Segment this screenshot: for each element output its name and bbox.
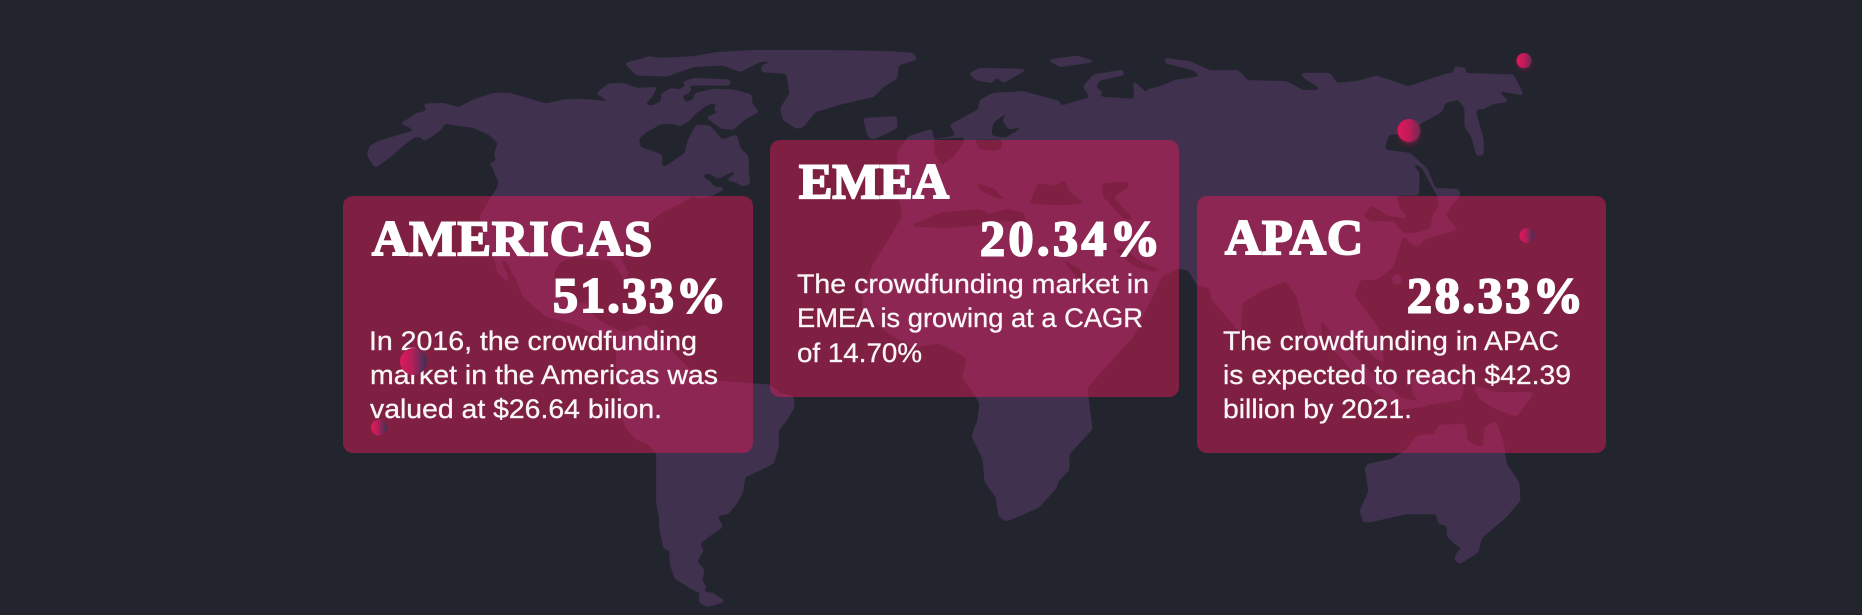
map: Franz Josef Land [1048, 56, 1095, 67]
dot: Americas large [400, 348, 427, 375]
map: Caspian Sea [1102, 182, 1133, 220]
map: inland seas [910, 110, 1439, 297]
APAC panel background [1197, 196, 1606, 453]
map: land masses [367, 50, 1534, 607]
APAC description: billion by 2021. [1223, 394, 1412, 424]
EMEA description: EMEA is growing at a CAGR [797, 303, 1143, 333]
map: Taiwan islet [1392, 275, 1402, 284]
map: Greenland [625, 50, 917, 128]
Americas description: valued at $26.64 bilion. [370, 394, 662, 424]
dot: top right [1516, 53, 1532, 70]
map: Baja California [495, 260, 508, 282]
EMEA description [797, 269, 1149, 368]
APAC description [1223, 326, 1571, 424]
panel: EMEA [770, 140, 1179, 397]
EMEA percentage: 20.34% [980, 210, 1160, 266]
map: North and South America [367, 83, 794, 592]
EMEA description: The crowdfunding market in [797, 269, 1149, 299]
map: Australia [1360, 422, 1520, 564]
Americas panel background [343, 196, 753, 453]
map: Mediterranean [910, 209, 1027, 228]
dot: APAC panel [1520, 228, 1534, 243]
map: New Guinea [1474, 386, 1534, 416]
EMEA panel background [770, 140, 1179, 397]
dot: Americas small [371, 420, 387, 436]
Americas description [369, 326, 718, 424]
APAC description: is expected to reach $42.39 [1223, 360, 1571, 390]
Americas description: market in the Americas was [370, 360, 718, 390]
map: Sea of Japan [1397, 196, 1439, 233]
Americas description: In 2016, the crowdfunding [369, 326, 697, 356]
APAC percentage: 28.33% [1407, 267, 1583, 323]
map: Baltic Sea [975, 140, 1002, 151]
Americas heading: AMERICAS [372, 210, 652, 266]
map: North Sea [933, 138, 964, 165]
EMEA description: of 14.70% [797, 338, 922, 368]
map: Eurasia and Africa [863, 58, 1523, 521]
map: Iceland [863, 117, 897, 139]
map: Arctic island [682, 78, 730, 85]
Americas percentage: 51.33% [553, 267, 726, 323]
EMEA heading: EMEA [799, 153, 949, 209]
map: Adriatic [977, 183, 1005, 200]
map: Sumatra and Java [1330, 343, 1427, 409]
map: Gulf of Bothnia [992, 110, 1023, 137]
dot: northeast Asia [1398, 119, 1420, 145]
map: Borneo [1410, 373, 1464, 404]
panel: APAC [1197, 196, 1606, 453]
map: Sea of Japan inlet [1413, 163, 1437, 197]
map: Svalbard [969, 68, 1027, 83]
world map [367, 50, 1534, 607]
map: Red Sea [1062, 258, 1100, 297]
APAC description: The crowdfunding in APAC [1223, 326, 1559, 356]
map: Black Sea [1030, 180, 1083, 205]
map: Yellow Sea [1364, 206, 1414, 233]
map: Novaya Zemlya [1083, 70, 1123, 97]
map: Tierra del Fuego [699, 592, 725, 607]
panel: Americas [343, 196, 753, 453]
map: Persian Gulf [1115, 248, 1160, 272]
APAC heading: APAC [1225, 209, 1363, 265]
